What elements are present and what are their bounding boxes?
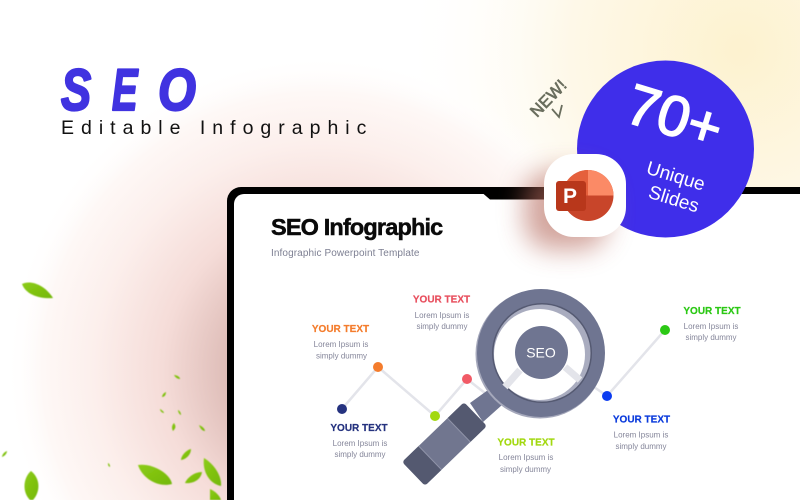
point: navy bbox=[337, 404, 347, 414]
point: red bbox=[462, 374, 472, 384]
label: red block: YOUR TEXT bbox=[413, 294, 470, 306]
label: blue block: Lorem Ipsum is bbox=[614, 430, 668, 440]
label: red block: Lorem Ipsum is bbox=[415, 311, 469, 320]
label: green block: YOUR TEXT bbox=[683, 306, 741, 317]
heading: SEO: E bbox=[112, 59, 138, 123]
label: lime block: simply dummy bbox=[500, 465, 551, 474]
label: blue block: YOUR TEXT bbox=[613, 414, 670, 426]
label: blue block bbox=[613, 414, 670, 451]
label: green block: simply dummy bbox=[685, 333, 737, 342]
badge: 70+ unique slides: Slides bbox=[646, 182, 701, 217]
point: orange bbox=[373, 362, 383, 372]
label: red block: simply dummy bbox=[416, 322, 468, 331]
label: navy block bbox=[330, 423, 388, 459]
magnifying glass: SEO bbox=[526, 344, 556, 360]
label: navy block: simply dummy bbox=[334, 450, 386, 459]
slide title: SEO Infographic bbox=[271, 214, 443, 240]
label: blue block: simply dummy bbox=[615, 442, 667, 451]
label: green block bbox=[683, 306, 741, 342]
powerpoint icon: P bbox=[563, 185, 577, 208]
handle body bbox=[402, 402, 487, 486]
heading: SEO: S bbox=[61, 59, 91, 123]
badge: 70+ unique slides: 70+ bbox=[619, 72, 730, 162]
label: red block bbox=[413, 294, 470, 331]
heading: SEO: O bbox=[158, 59, 196, 123]
laptop screen frame bbox=[227, 187, 800, 500]
label: lime block: Lorem Ipsum is bbox=[499, 453, 553, 462]
powerpoint icon bbox=[524, 154, 626, 250]
magnifying glass bbox=[402, 289, 605, 486]
label: orange block bbox=[312, 324, 369, 360]
point: green bbox=[660, 325, 670, 335]
label: green block: Lorem Ipsum is bbox=[684, 322, 738, 331]
NEW! note: NEW! bbox=[527, 76, 571, 121]
badge: 70+ unique slides bbox=[577, 60, 754, 238]
point: lime bbox=[430, 411, 440, 421]
subheading: Editable Infographic bbox=[61, 117, 373, 139]
label: lime block bbox=[497, 438, 555, 474]
line chart bbox=[337, 325, 670, 421]
badge: 70+ unique slides: Unique bbox=[644, 158, 707, 196]
SEO hub bbox=[515, 326, 568, 379]
handle neck bbox=[470, 390, 502, 422]
leaves bbox=[2, 283, 221, 500]
lens ring bbox=[476, 290, 604, 418]
label: orange block: Lorem Ipsum is bbox=[314, 340, 368, 349]
label: navy block: Lorem Ipsum is bbox=[333, 439, 387, 448]
chart line through lens bbox=[505, 367, 580, 387]
label: lime block: YOUR TEXT bbox=[497, 438, 555, 448]
slide subtitle: Infographic Powerpoint Template bbox=[271, 248, 420, 259]
label: orange block: YOUR TEXT bbox=[312, 324, 369, 335]
label: orange block: simply dummy bbox=[316, 352, 367, 360]
point: blue bbox=[602, 391, 612, 401]
label: navy block: YOUR TEXT bbox=[330, 423, 388, 434]
heading: SEO bbox=[61, 59, 196, 123]
